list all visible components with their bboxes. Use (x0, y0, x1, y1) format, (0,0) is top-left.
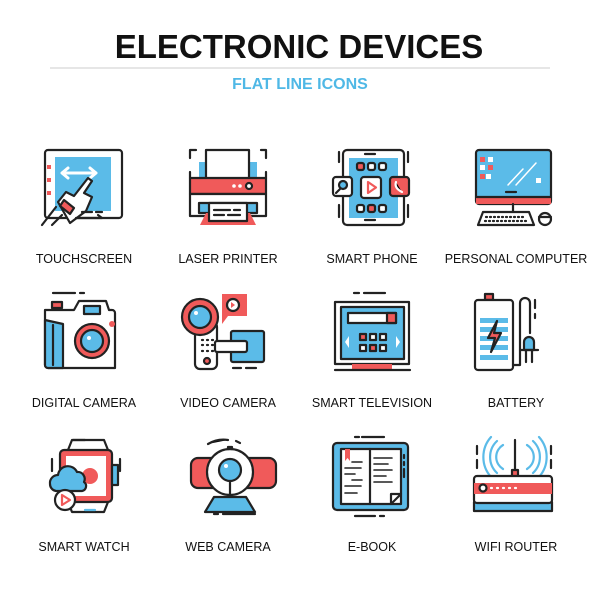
icon: personal computer (476, 150, 551, 225)
label: battery: BATTERY (488, 396, 545, 410)
label: smart watch: SMART WATCH (38, 540, 130, 554)
label: touchscreen: TOUCHSCREEN (36, 252, 132, 266)
icon: smart television (335, 293, 410, 370)
label: web camera: WEB CAMERA (185, 540, 271, 554)
icon: touchscreen (42, 150, 122, 225)
icon: wifi router (483, 437, 547, 477)
icon: web camera (191, 440, 276, 514)
label: personal computer: PERSONAL COMPUTER (445, 252, 587, 266)
title: ELECTRONIC DEVICES (115, 28, 483, 65)
icon: video camera (182, 294, 264, 369)
icon: e-book (333, 437, 408, 516)
label: e-book: E-BOOK (348, 540, 397, 554)
label: digital camera: DIGITAL CAMERA (32, 396, 137, 410)
subtitle: FLAT LINE ICONS (232, 76, 368, 93)
icon: laser printer (190, 150, 266, 225)
label: smart television: SMART TELEVISION (312, 396, 432, 410)
label: smart phone: SMART PHONE (326, 252, 418, 266)
icon: battery (475, 294, 538, 370)
icon: smart phone (333, 150, 409, 225)
icon: smart watch (50, 440, 120, 512)
icon: digital camera (45, 293, 115, 368)
label: wifi router: WIFI ROUTER (475, 540, 557, 554)
label: video camera: VIDEO CAMERA (180, 396, 277, 410)
label: laser printer: LASER PRINTER (178, 252, 278, 266)
